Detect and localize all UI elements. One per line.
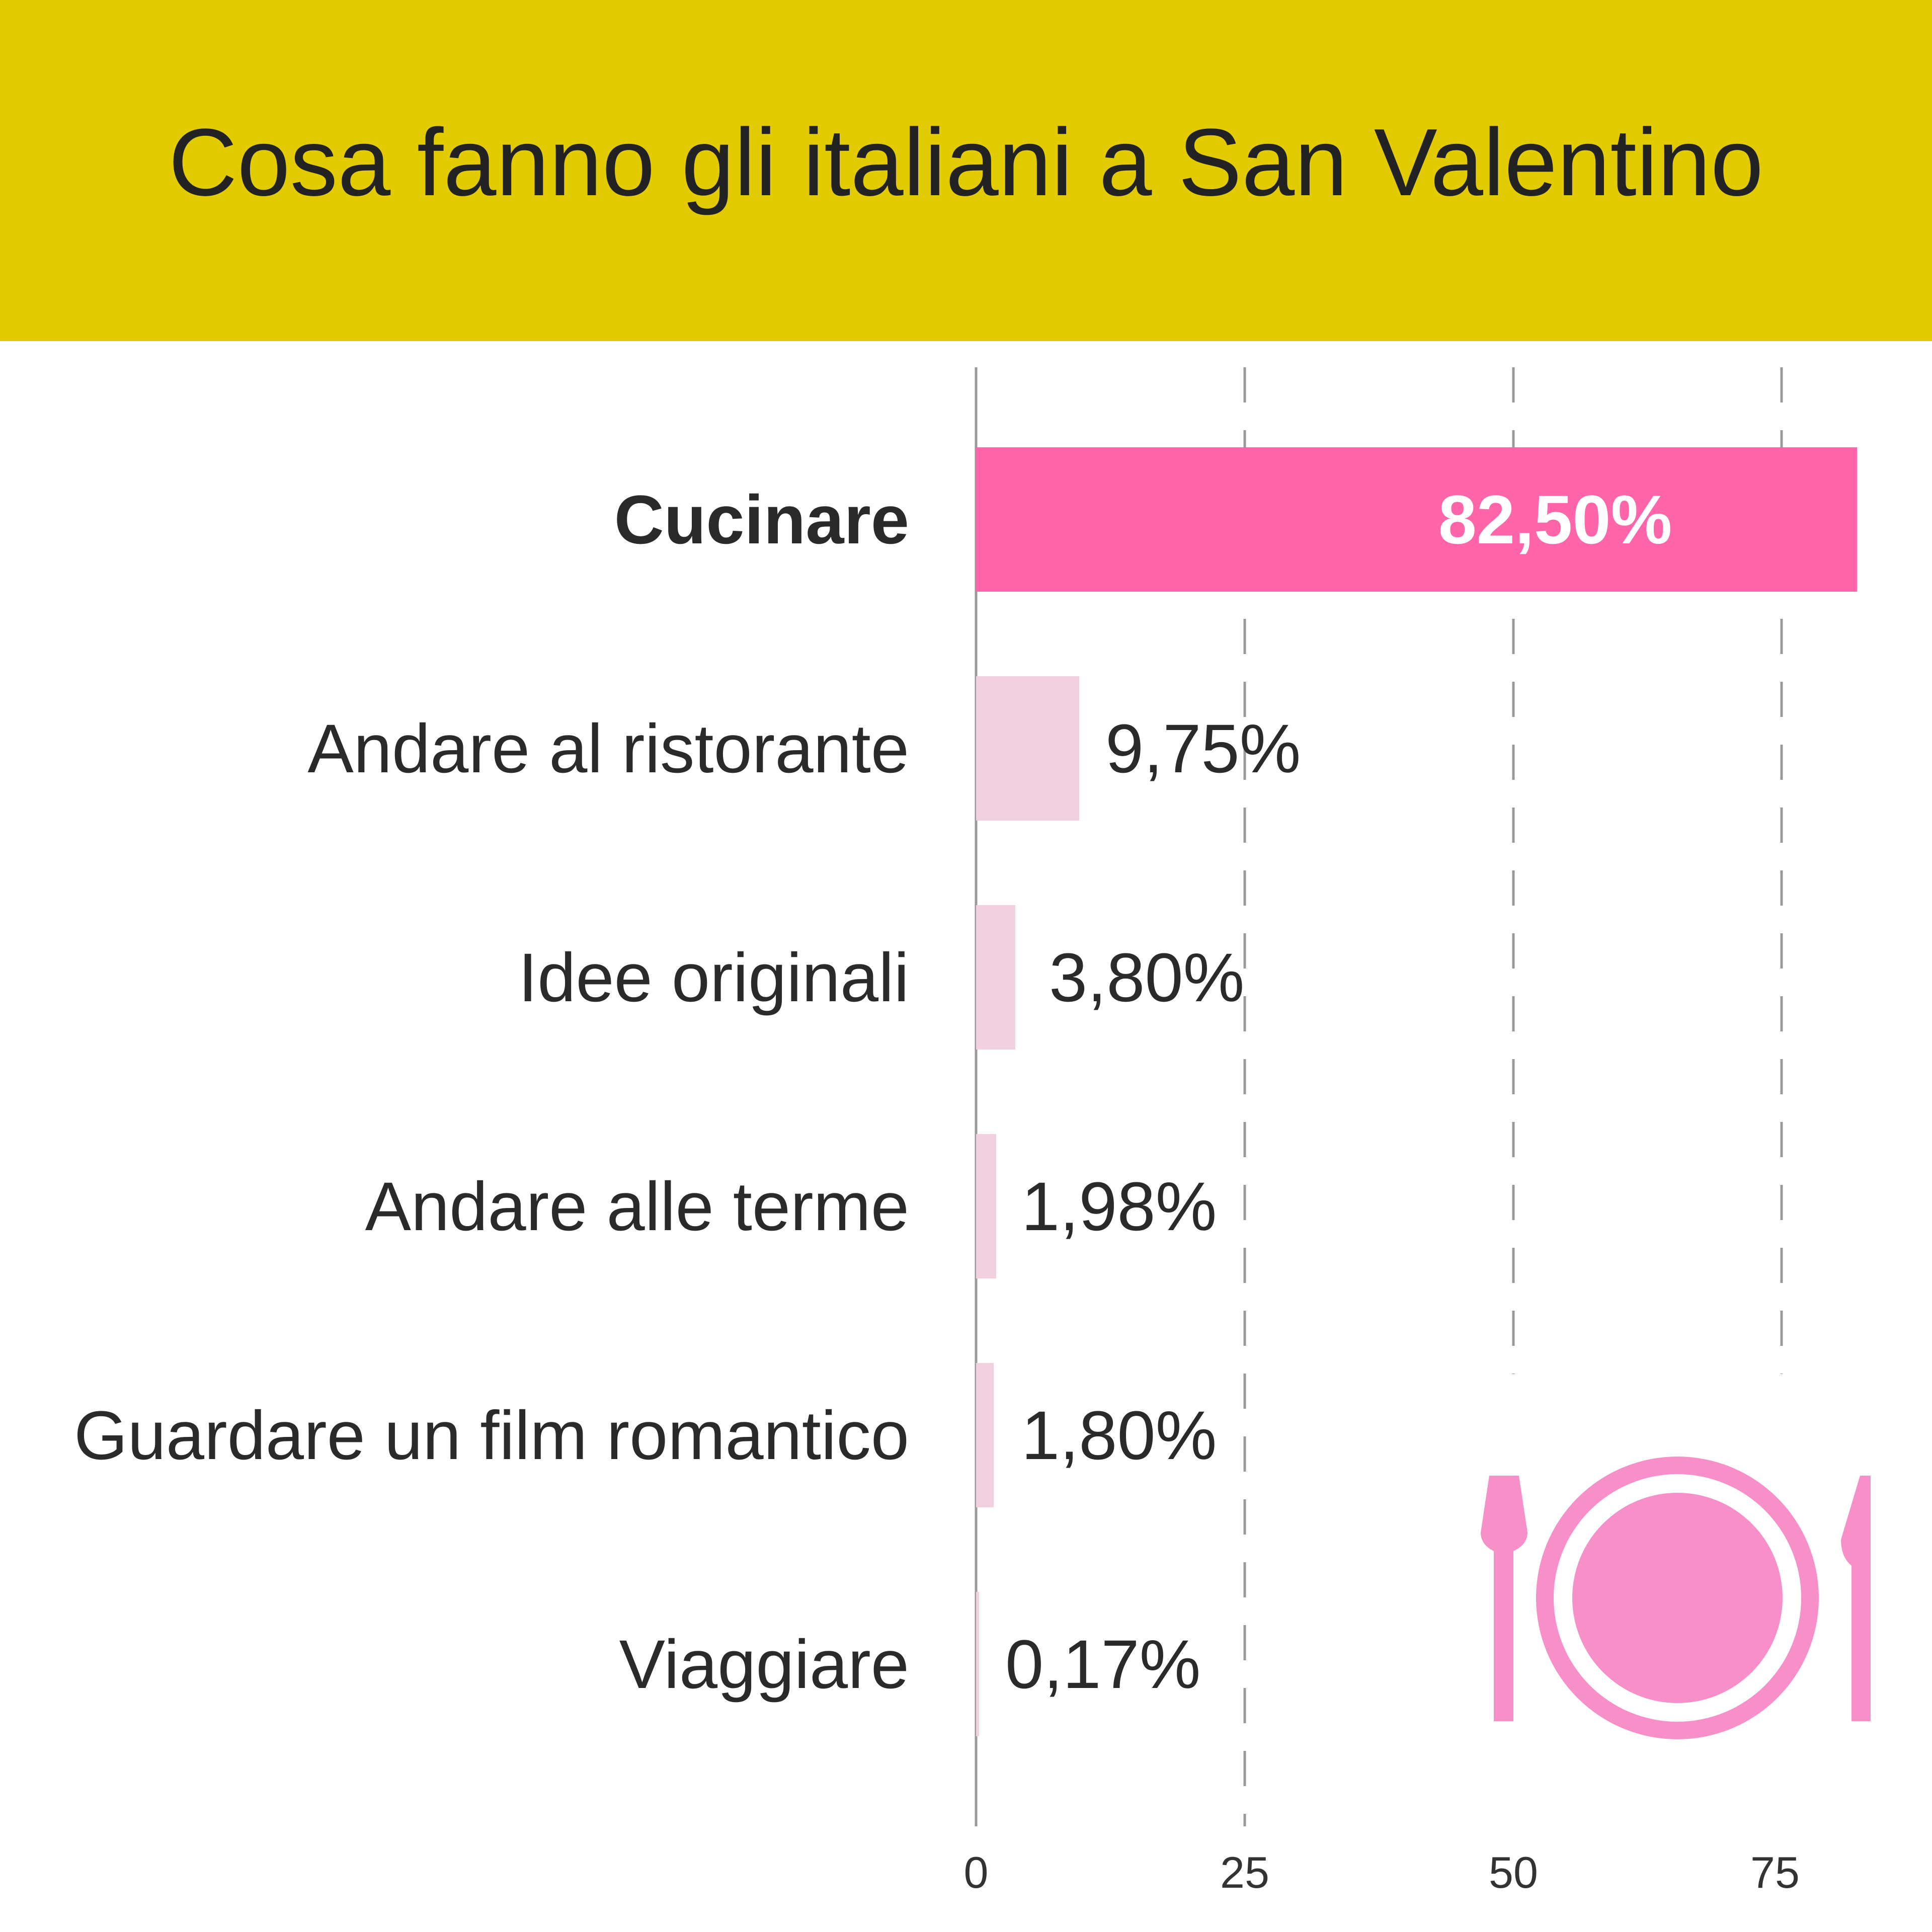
axis tick labels: 25 — [1220, 1847, 1269, 1897]
bar: Andare al ristorante: 9,75% — [1105, 710, 1301, 787]
icon: plate with fork and knife — [1481, 1457, 1871, 1739]
axis line — [975, 367, 977, 1826]
bar: Andare al ristorante: Andare al ristorante — [307, 710, 909, 787]
bar chart — [74, 447, 1857, 1736]
axis tick labels: 75 — [1750, 1847, 1800, 1897]
bar: Viaggiare — [619, 1592, 1200, 1736]
bar: Guardare un film romantico: Guardare un film romantico — [74, 1397, 909, 1474]
bar: Andare alle terme: Andare alle terme — [365, 1168, 909, 1245]
bar: Andare alle terme — [365, 1134, 1217, 1278]
bar: Guardare un film romantico — [74, 1363, 1217, 1507]
bar: Cucinare — [614, 447, 1857, 592]
header band — [0, 0, 1932, 341]
bar: Cucinare: 82,50% — [1438, 481, 1672, 558]
bar: Idee originali — [518, 905, 1244, 1050]
bar: Viaggiare: Viaggiare — [619, 1626, 909, 1703]
bar: Viaggiare: 0,17% — [1005, 1626, 1200, 1703]
bar: Andare alle terme: 1,98% — [1021, 1168, 1217, 1245]
bar: Guardare un film romantico: 1,80% — [1021, 1397, 1217, 1474]
axis tick labels: 0 — [964, 1847, 988, 1897]
axis tick labels: 50 — [1489, 1847, 1538, 1897]
grid lines — [1245, 367, 1782, 1826]
title: Cosa fanno gli italiani a San Valentino — [169, 109, 1763, 216]
bar: Andare al ristorante — [307, 676, 1301, 821]
bar: Cucinare: Cucinare — [614, 481, 909, 558]
bar: Idee originali: 3,80% — [1049, 939, 1244, 1016]
axis tick labels — [964, 1847, 1800, 1897]
bar: Idee originali: Idee originali — [518, 939, 909, 1016]
